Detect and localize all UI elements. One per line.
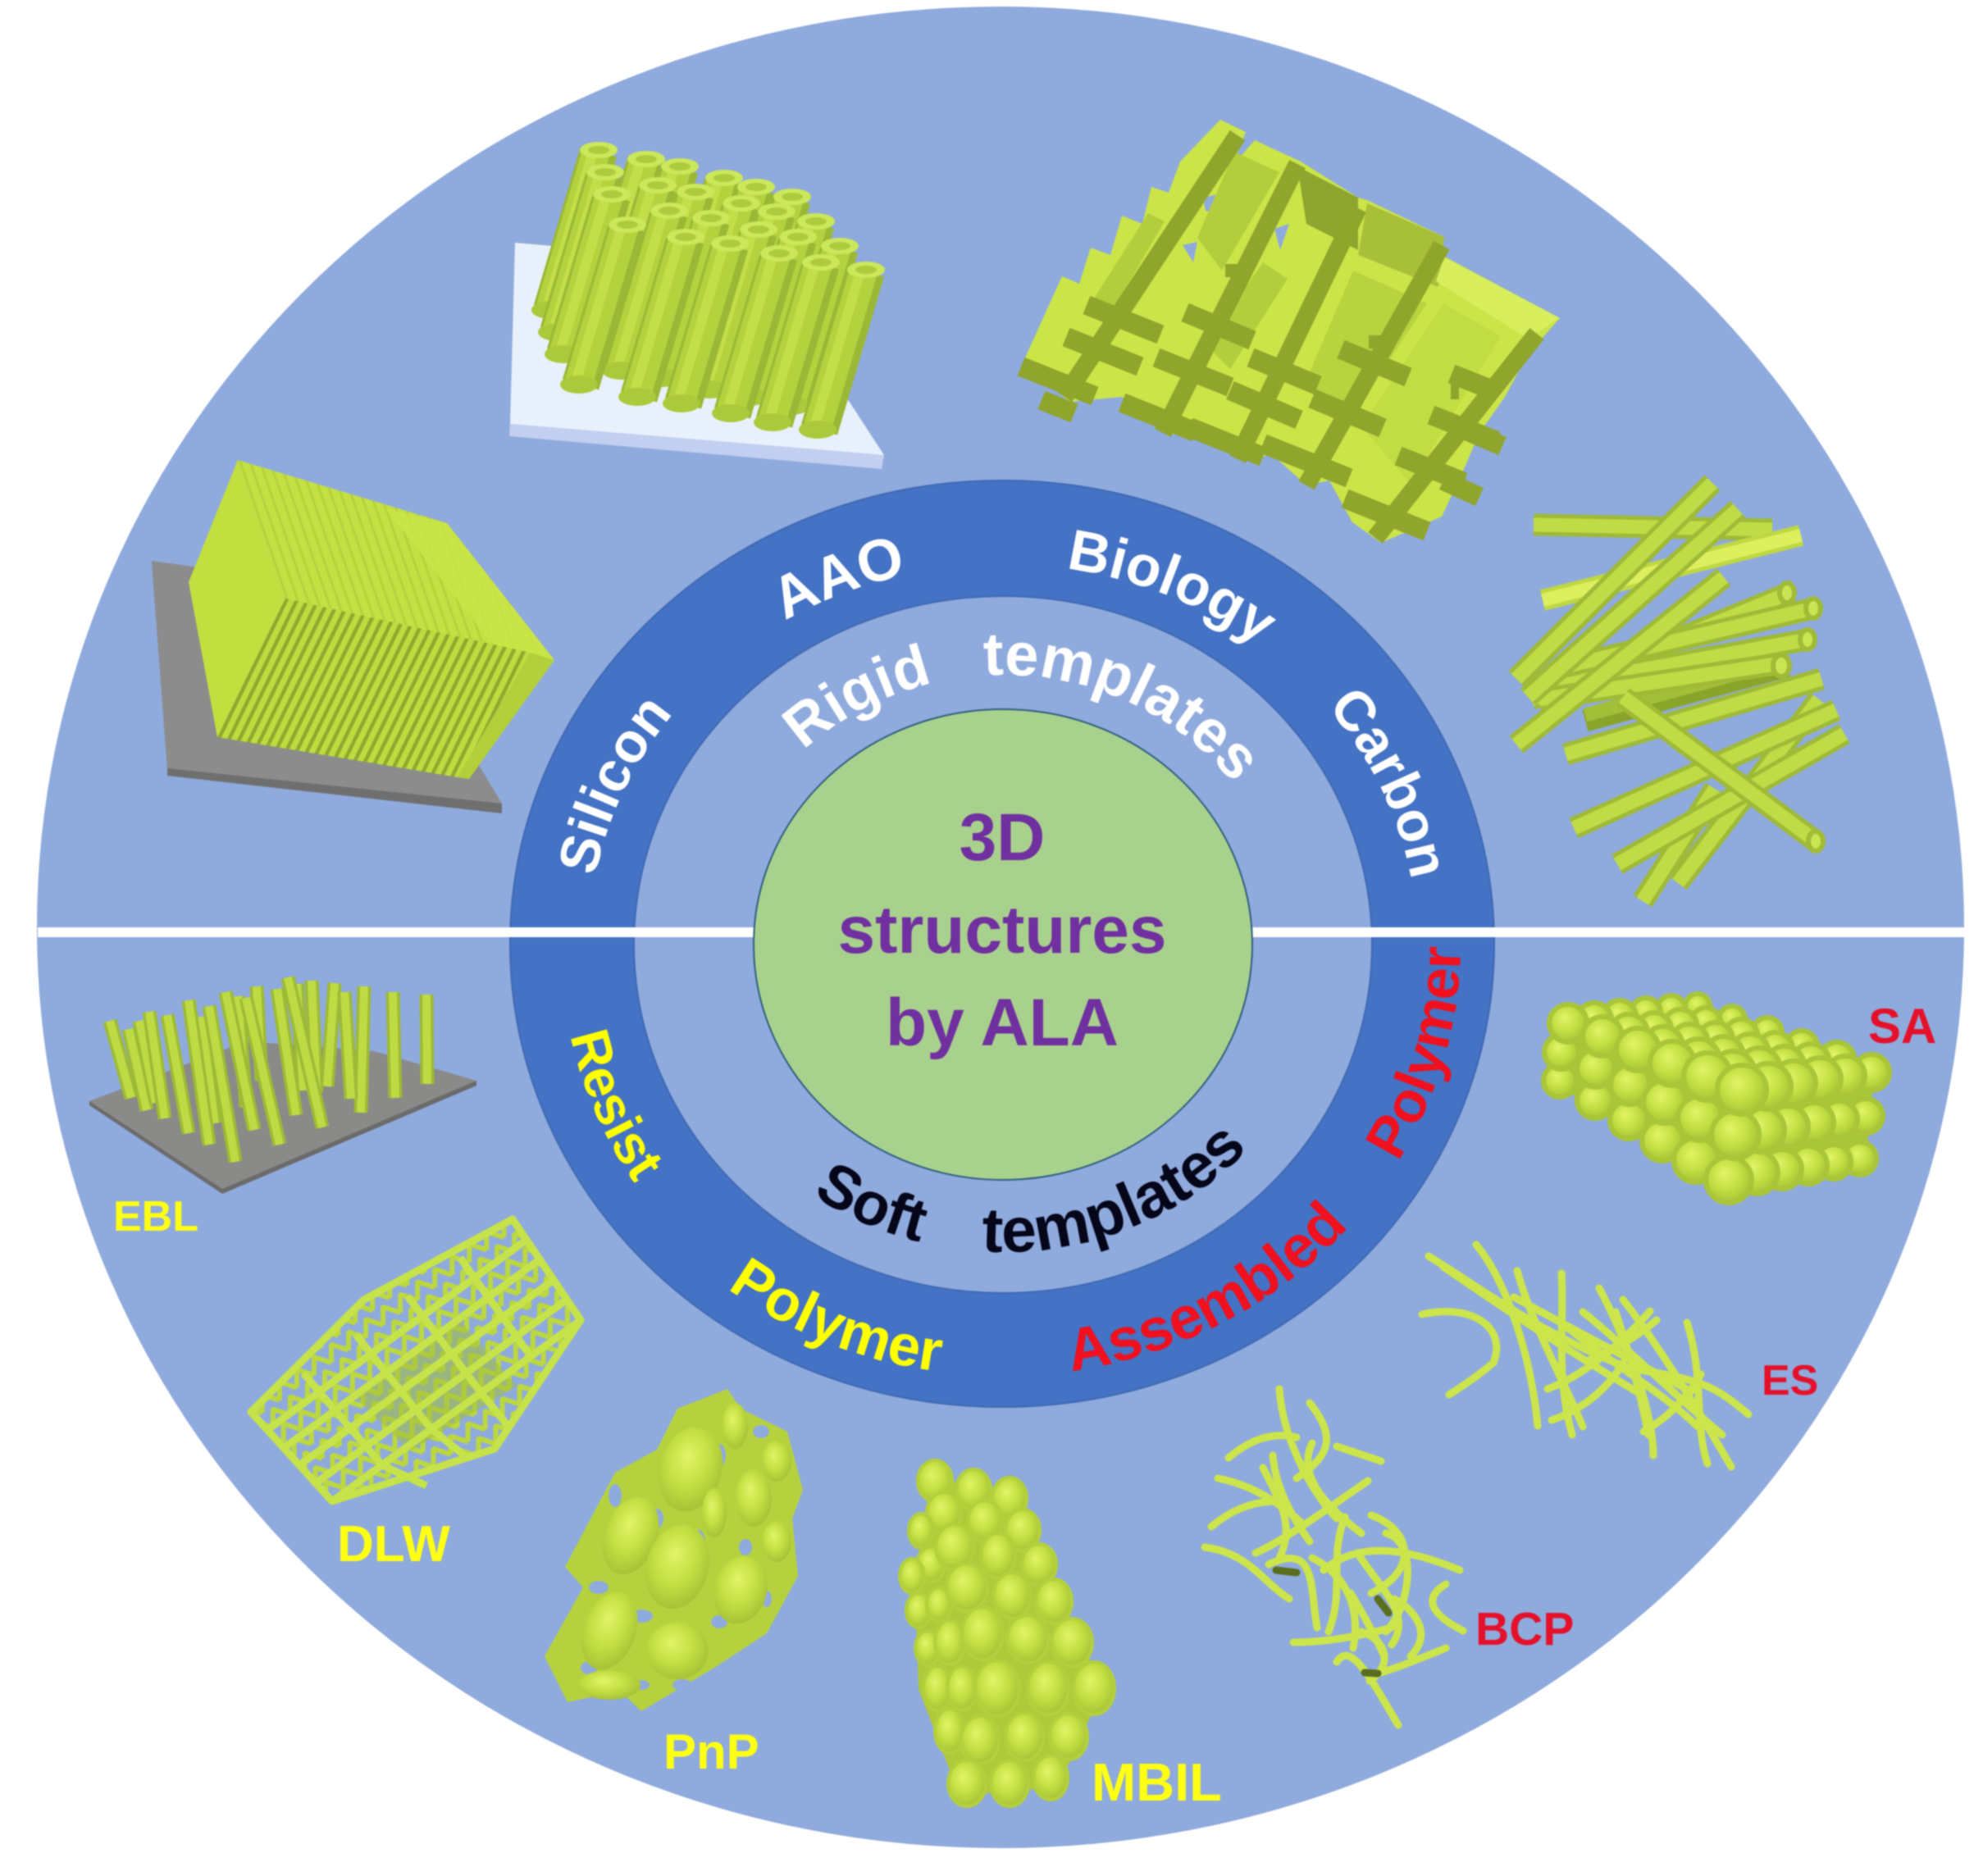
ring label: Carbon: Carbon bbox=[1334, 690, 1439, 877]
ring label: Polymer red: Polymer bbox=[1365, 946, 1461, 1159]
structure: biological scaffold bbox=[1021, 120, 1560, 543]
structure: carbon nanotubes bbox=[1516, 483, 1844, 901]
center title bbox=[837, 800, 1167, 1060]
ring label: Polymer yellow: Polymer bbox=[730, 1256, 944, 1371]
label: SA: SA bbox=[1868, 999, 1936, 1054]
center title: by ALA bbox=[886, 986, 1119, 1060]
structure: AAO nanotube array bbox=[509, 142, 885, 469]
label: PnP: PnP bbox=[663, 1724, 759, 1779]
ring label: Biology: Biology bbox=[1069, 529, 1277, 644]
structure: BCP network bbox=[1205, 1389, 1463, 1725]
structure: DLW lattice bbox=[251, 1219, 581, 1501]
ring label: Assembled: Assembled bbox=[1072, 1199, 1347, 1373]
center title: 3D bbox=[960, 800, 1045, 875]
outer ring bbox=[510, 480, 1494, 1407]
ring label: Resist: Resist bbox=[570, 1028, 662, 1184]
center title: structures bbox=[837, 893, 1167, 968]
label: ES: ES bbox=[1762, 1357, 1818, 1405]
structure: silicon nanowall block bbox=[152, 460, 554, 813]
center circle bbox=[754, 709, 1252, 1180]
structure: ES fibers bbox=[1422, 1245, 1748, 1467]
horizontal divider bbox=[38, 927, 1965, 937]
band label: Rigid: Rigid bbox=[781, 642, 930, 748]
label: BCP: BCP bbox=[1475, 1603, 1574, 1655]
band label: templates bottom: templates bbox=[982, 1130, 1243, 1254]
label: EBL: EBL bbox=[113, 1193, 198, 1241]
ring label: Silicon: Silicon bbox=[559, 700, 672, 873]
structure: MBIL spheres bbox=[900, 1460, 1115, 1806]
band label: templates top: templates bbox=[982, 635, 1253, 779]
structure: SA sphere stack bbox=[1543, 994, 1890, 1203]
structure: EBL pillars bbox=[89, 977, 476, 1194]
ring label: AAO: AAO bbox=[781, 538, 901, 620]
structure: PnP network bbox=[545, 1389, 803, 1711]
label: DLW: DLW bbox=[337, 1516, 450, 1573]
inner band bbox=[634, 596, 1372, 1293]
label: MBIL: MBIL bbox=[1092, 1752, 1222, 1812]
band label: Soft: Soft bbox=[818, 1164, 928, 1243]
